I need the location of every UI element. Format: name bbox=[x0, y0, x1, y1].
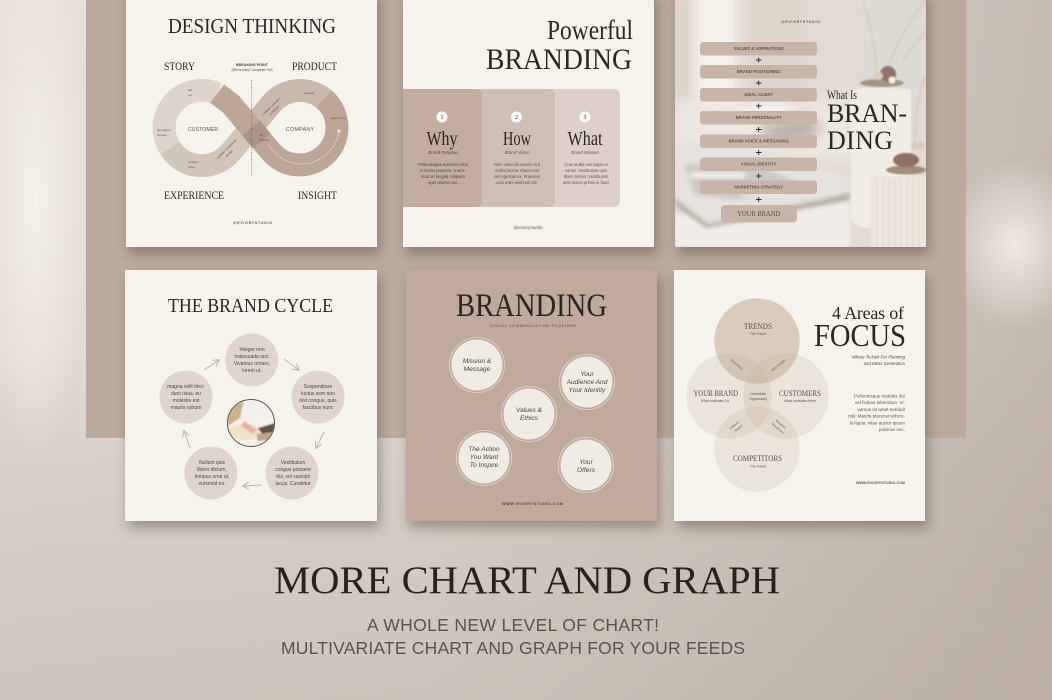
column: why: 1 bbox=[440, 115, 444, 121]
handle: @EVIORYSTUDIO bbox=[233, 221, 272, 225]
cycle text: lacus. Curabitur bbox=[275, 481, 311, 487]
breaking point note bbox=[232, 63, 272, 72]
venn labels: The Future bbox=[750, 464, 766, 468]
loop labels: me bbox=[188, 93, 192, 97]
circle: offers bbox=[558, 438, 614, 492]
body text: vel finibus bibendum. Vi- bbox=[855, 400, 905, 405]
cycle text: magna velit tinci- bbox=[167, 384, 205, 390]
heading: what is branding bbox=[827, 87, 907, 155]
loop labels: validate / prepare bbox=[262, 96, 281, 116]
corner labels: PRODUCT bbox=[292, 61, 337, 73]
venn labels: What motivates them bbox=[784, 399, 816, 403]
subheading: Where To look For Planning bbox=[852, 354, 906, 360]
cycle text: Vestibulum bbox=[281, 460, 305, 466]
body text: vamus sit amet suscipit bbox=[858, 407, 906, 412]
heading: what is branding: BRAN- bbox=[827, 99, 907, 128]
cycle text: malesuada orci. bbox=[234, 354, 270, 360]
body text: la ligula, vitae auctor ipsum bbox=[850, 420, 905, 425]
column: what bbox=[540, 89, 620, 207]
column: how: Nam vehicula mauris sed bbox=[494, 162, 541, 167]
venn labels: The Future bbox=[750, 332, 766, 336]
body text: nisl. Mauris placerat vehicu- bbox=[848, 414, 905, 419]
stacked steps: BRAND VOICE & MESSAGING bbox=[729, 138, 789, 144]
cycle text: molestie est bbox=[173, 398, 200, 404]
heading: 4 areas of focus: 4 Areas of bbox=[832, 303, 904, 323]
column: how: quis enim eleifend nisi. bbox=[496, 180, 538, 185]
column: why: Why bbox=[426, 128, 458, 150]
subtitle: MULTIVARIATE CHART AND GRAPH FOR YOUR FEEDS bbox=[281, 638, 745, 658]
venn labels: New Insight bbox=[771, 358, 786, 372]
column: how: Brand Vision bbox=[505, 150, 530, 155]
loop labels: COMPANY bbox=[286, 127, 315, 133]
column: what: varius. Vestibulum quis bbox=[565, 168, 607, 173]
dried flower top bbox=[860, 66, 904, 87]
panel: powerful branding bbox=[403, 0, 654, 247]
stacked steps: BRAND POSITIONING bbox=[737, 69, 781, 74]
handle: @EVIORYSTUDIO bbox=[781, 20, 820, 24]
panel: what is branding bbox=[675, 0, 930, 247]
venn labels: COMPETITORS bbox=[733, 454, 782, 463]
venn labels: Innovation bbox=[730, 358, 744, 371]
venn labels: YOUR BRAND bbox=[694, 389, 738, 398]
cycle text: dui, vel suscipit bbox=[276, 474, 311, 480]
venn labels: TRENDS bbox=[744, 322, 772, 331]
stacked steps: MARKETING STRATEGY bbox=[734, 184, 783, 190]
cycle text: congue posuere bbox=[275, 467, 311, 473]
column: how: sed egestas ex. Praesent bbox=[494, 174, 541, 179]
stacked steps: IDEAL CLIENT bbox=[744, 92, 774, 97]
heading: design thinking: DESIGN THINKING bbox=[168, 14, 336, 38]
loop labels: CUSTOMER bbox=[188, 127, 218, 133]
subheading: and Ideas Generation bbox=[864, 361, 906, 366]
table bbox=[675, 195, 850, 247]
cycle text: nisl congue, quis bbox=[299, 398, 337, 404]
column: what: What bbox=[568, 128, 603, 150]
panel: design thinking bbox=[126, 0, 377, 247]
circle: action: You Want bbox=[470, 454, 499, 461]
column: how: How bbox=[503, 128, 531, 150]
subtitle: A WHOLE NEW LEVEL OF CHART! bbox=[367, 615, 659, 635]
loop labels: opportunity bbox=[331, 116, 346, 120]
column: why: eget viverra nisi. bbox=[428, 180, 458, 185]
loop labels: prototype bbox=[268, 104, 280, 116]
cycle text: Integer non bbox=[239, 347, 265, 353]
column: why: in lectus posuere, a auis- bbox=[420, 168, 466, 173]
venn labels: CUSTOMERS bbox=[779, 389, 821, 398]
venn labels: Whether bbox=[775, 419, 787, 430]
column: what: 3 bbox=[584, 115, 586, 121]
subheading: VISUAL COMMUNICATION REQUIRED bbox=[490, 324, 576, 328]
subtitle bbox=[281, 615, 745, 658]
book bbox=[675, 163, 851, 230]
venn labels: Stages bbox=[733, 423, 744, 433]
heading: 4 areas of focus: FOCUS bbox=[814, 317, 906, 353]
vase tall bbox=[851, 87, 911, 228]
circle: action bbox=[456, 430, 512, 486]
cycle text: Suspendisse bbox=[304, 384, 333, 390]
corner labels: INSIGHT bbox=[298, 190, 337, 202]
panel: branding circles bbox=[406, 270, 657, 521]
cycle text: luctus sem non bbox=[301, 391, 335, 397]
center photo bbox=[227, 400, 275, 446]
column: what: ante ipsum primis in fauci bbox=[563, 180, 609, 185]
loop labels: solution bbox=[304, 91, 314, 95]
brown backdrop band bbox=[86, 0, 966, 438]
stacked steps: YOUR BRAND bbox=[737, 210, 780, 218]
circle: offers: Offers bbox=[577, 467, 596, 474]
loop labels: change bbox=[157, 133, 167, 137]
stacked steps bbox=[700, 42, 817, 222]
heading: powerful branding: Powerful bbox=[547, 15, 633, 45]
handle: @eviorystudio bbox=[513, 225, 543, 230]
breaking line bbox=[251, 80, 253, 176]
loop labels: fail bbox=[259, 133, 263, 137]
venn labels: Wanderers bbox=[770, 422, 785, 435]
cycle text: libero dictum, bbox=[197, 467, 227, 473]
heading: the brand cycle: THE BRAND CYCLE bbox=[168, 295, 333, 317]
column: how bbox=[470, 89, 555, 207]
circle: mission and message bbox=[450, 338, 504, 392]
loop labels: validate / contextual bbox=[215, 138, 237, 160]
stacked steps: VISUAL IDENTITY bbox=[741, 162, 777, 166]
heading: 4 areas of focus bbox=[814, 303, 906, 353]
heading: powerful branding: BRANDING bbox=[486, 43, 632, 76]
body text: Pellentesque sodales dui bbox=[854, 394, 905, 398]
cycle text: euismod ex. bbox=[199, 481, 225, 487]
stacked steps: VALUES & ASPIRATIONS bbox=[734, 46, 784, 51]
stacked steps: BRAND PERSONALITY bbox=[736, 115, 782, 120]
circle: mission and message: Message bbox=[464, 366, 491, 373]
url: WWW.EVIORYSTUDIO.COM bbox=[502, 501, 564, 506]
cycle text: dunt risus, eu bbox=[171, 391, 201, 397]
circle: audience: Audience And bbox=[566, 379, 608, 386]
heading: what is branding: What Is bbox=[827, 87, 857, 102]
breaking point note: BREAKING POINT bbox=[236, 63, 269, 67]
circle: action: The Action bbox=[468, 446, 500, 453]
heading: what is branding: DING bbox=[827, 126, 893, 155]
circle: offers: Your bbox=[579, 459, 594, 466]
infinity chart bbox=[164, 90, 340, 166]
venn labels: Immediate bbox=[750, 392, 766, 396]
heading: branding: BRANDING bbox=[456, 288, 607, 324]
cycle circles bbox=[160, 334, 344, 500]
photo: vases and book bbox=[675, 0, 930, 247]
loop labels: perception bbox=[157, 128, 171, 132]
column: why: Pellentesque euismod urna bbox=[418, 162, 469, 167]
loop labels: solve bbox=[188, 165, 195, 169]
corner labels bbox=[164, 61, 337, 202]
corner labels: EXPERIENCE bbox=[164, 190, 224, 202]
column: how: mollis lacinia. Maecenas bbox=[495, 168, 539, 173]
circle: audience bbox=[560, 354, 614, 410]
column: why: Brand Purpose bbox=[428, 150, 458, 155]
circle: mission and message: Mission & bbox=[463, 358, 492, 365]
column: how: 2 bbox=[515, 115, 518, 121]
circle: action: To Inspire bbox=[470, 462, 499, 469]
circle: values: Values & bbox=[516, 407, 543, 414]
cycle text: lorem ut. bbox=[242, 368, 262, 374]
venn labels: What motivates Us bbox=[701, 399, 730, 403]
dried plant stems bbox=[862, 0, 926, 145]
loop labels bbox=[157, 88, 346, 169]
venn labels: Opportunity bbox=[749, 397, 767, 401]
column: why: mod on feugiat. Aliquam bbox=[421, 174, 466, 179]
loop labels: problem bbox=[188, 160, 199, 164]
circle: values bbox=[502, 386, 556, 442]
circle: audience: Your Identity bbox=[569, 387, 606, 394]
cycle arrows bbox=[184, 359, 324, 486]
main title: MORE CHART AND GRAPH bbox=[274, 559, 780, 602]
column: what: Cras mollis non turpis in bbox=[564, 162, 609, 167]
loop labels: design bbox=[225, 149, 234, 158]
dried flower lower bbox=[886, 142, 926, 174]
cycle text: mauris rutrum bbox=[171, 405, 201, 411]
heading: powerful branding bbox=[486, 15, 633, 76]
panel: four areas of focus bbox=[674, 270, 925, 521]
corner labels: STORY bbox=[164, 61, 196, 73]
breaking point note: (Where many Companies Fail) bbox=[232, 68, 272, 72]
venn labels bbox=[694, 322, 821, 468]
body text: pulvinar nec. bbox=[879, 427, 905, 432]
cycle text: Nullam quis bbox=[199, 460, 226, 466]
venn labels: Unilever bbox=[729, 419, 741, 431]
cycle text bbox=[167, 347, 337, 487]
panel: brand cycle bbox=[125, 270, 377, 521]
circle: values: Ethics bbox=[520, 415, 539, 422]
column: why bbox=[403, 89, 482, 207]
cycle text: tempus urna ut, bbox=[195, 474, 229, 480]
venn diagram bbox=[686, 298, 829, 492]
column: what: Brand Mission bbox=[571, 150, 599, 155]
url: WWW.EVIORYSTUDIO.COM bbox=[856, 481, 905, 485]
circle: audience: Your bbox=[580, 371, 595, 378]
loop labels: tell bbox=[188, 88, 192, 92]
loop labels: problem bbox=[259, 138, 270, 142]
column: what: libero metus. Vestibulum bbox=[564, 174, 609, 179]
cycle text: Vivamus ornare, bbox=[234, 361, 270, 367]
ribbed vase bbox=[871, 176, 926, 247]
cycle text: faucibus nunc bbox=[303, 405, 334, 411]
